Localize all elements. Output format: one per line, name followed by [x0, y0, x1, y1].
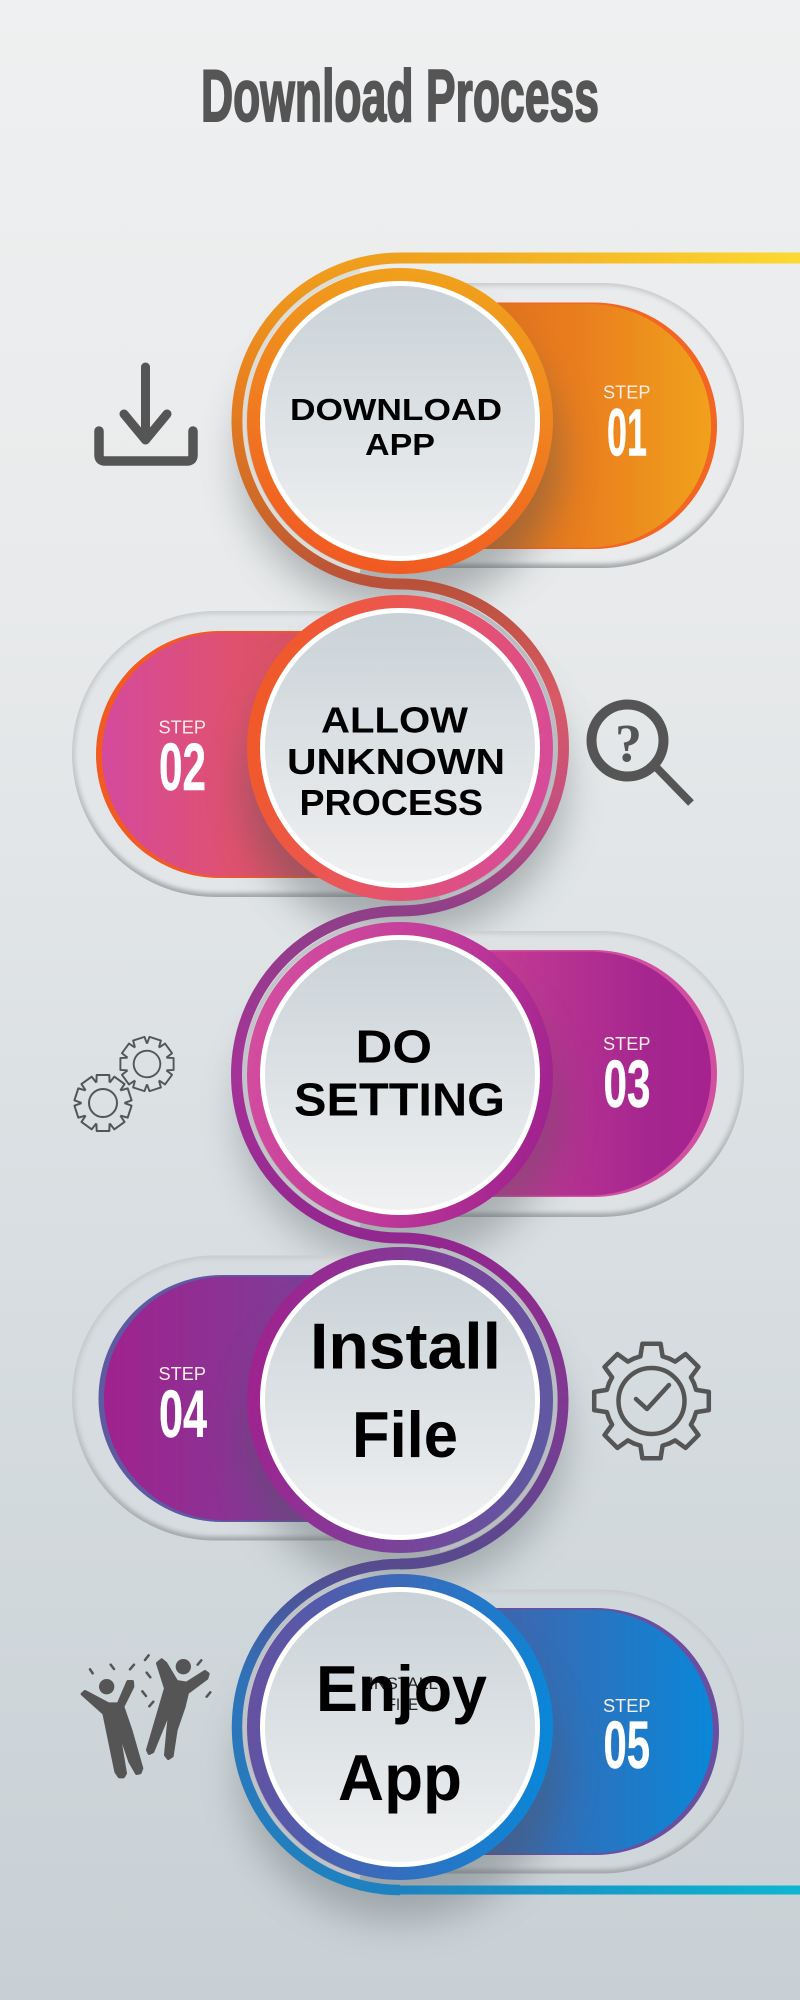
pill: step 4	[72, 1256, 516, 1540]
icon: magnifier with question mark: ?	[615, 713, 642, 773]
shadow	[240, 1620, 560, 1920]
heading: allow unknown process: PROCESS	[300, 782, 483, 823]
ribbon: around circle 5 to right edge	[237, 1564, 400, 1890]
label: step 05: STEP	[603, 1696, 650, 1716]
heading: do setting: SETTING	[294, 1074, 505, 1126]
faint label: install file: FILE	[387, 1695, 418, 1714]
pill: step 5	[300, 1590, 744, 1874]
icon: celebrating people	[82, 1655, 210, 1777]
heading: download app: DOWNLOAD	[290, 393, 502, 427]
label: step 01: 01	[607, 396, 647, 470]
faint label: install file	[369, 1674, 438, 1714]
gear: upper	[113, 1030, 181, 1098]
heading: allow unknown process: UNKNOWN	[287, 741, 505, 782]
ribbon: around circle 2	[400, 584, 564, 911]
circle: step 3	[247, 922, 553, 1228]
circle: step 4	[247, 1247, 553, 1553]
heading: download app: APP	[365, 428, 435, 462]
heading: enjoy app	[316, 1652, 487, 1814]
faint label: install file: INSTALL	[369, 1674, 438, 1693]
label: step 04: 04	[159, 1377, 207, 1452]
heading: install file: Install	[310, 1310, 501, 1382]
label: step 05	[603, 1696, 650, 1783]
shadow	[245, 1287, 565, 1587]
label: step 05: 05	[604, 1708, 650, 1783]
label: step 03: STEP	[603, 1034, 650, 1054]
label: step 01: STEP	[603, 382, 650, 402]
icon: download	[99, 367, 193, 461]
panel: step 3	[237, 911, 744, 1262]
label: step 02: 02	[159, 730, 206, 805]
pill: step 3	[300, 931, 744, 1217]
panel: step 1	[237, 258, 800, 608]
heading: allow unknown process	[287, 700, 505, 823]
heading: allow unknown process: ALLOW	[321, 700, 468, 740]
person: left	[82, 1679, 142, 1777]
gear: lower	[74, 1075, 132, 1131]
heading: enjoy app: Enjoy	[316, 1652, 487, 1725]
ribbon: top line around circle 1	[400, 252, 800, 264]
shadow	[245, 635, 565, 935]
heading: do setting: DO	[356, 1020, 432, 1072]
person: right	[148, 1659, 208, 1758]
label: step 02	[158, 718, 206, 805]
pill: step 2	[72, 611, 516, 897]
panel: step 2	[72, 584, 565, 935]
circle: step 1	[247, 268, 553, 574]
panel: step 5	[237, 1564, 800, 1920]
circle: step 5	[247, 1574, 553, 1880]
heading: install file: File	[352, 1398, 458, 1471]
label: step 03	[603, 1034, 650, 1122]
ribbon: around circle 4	[400, 1238, 563, 1564]
heading: enjoy app: App	[338, 1741, 462, 1814]
label: step 04	[158, 1364, 207, 1452]
circle: step 2	[247, 595, 553, 901]
heading: download app	[290, 393, 502, 462]
pill: step 1	[300, 283, 744, 568]
icon: magnifier with question mark	[592, 704, 691, 803]
panel: step 4	[72, 1238, 565, 1587]
heading: install file	[310, 1310, 501, 1471]
label: step 01	[603, 382, 650, 470]
icon: gear with check mark	[594, 1344, 709, 1458]
heading: do setting	[294, 1020, 505, 1126]
shadow	[240, 962, 560, 1262]
label: step 03: 03	[604, 1047, 650, 1122]
sparks	[90, 1655, 210, 1706]
icon: two gears	[74, 1030, 181, 1131]
label: step 02: STEP	[158, 718, 206, 738]
ribbon: around circle 3	[237, 911, 400, 1238]
shadow	[240, 308, 560, 608]
label: step 04: STEP	[158, 1364, 206, 1384]
